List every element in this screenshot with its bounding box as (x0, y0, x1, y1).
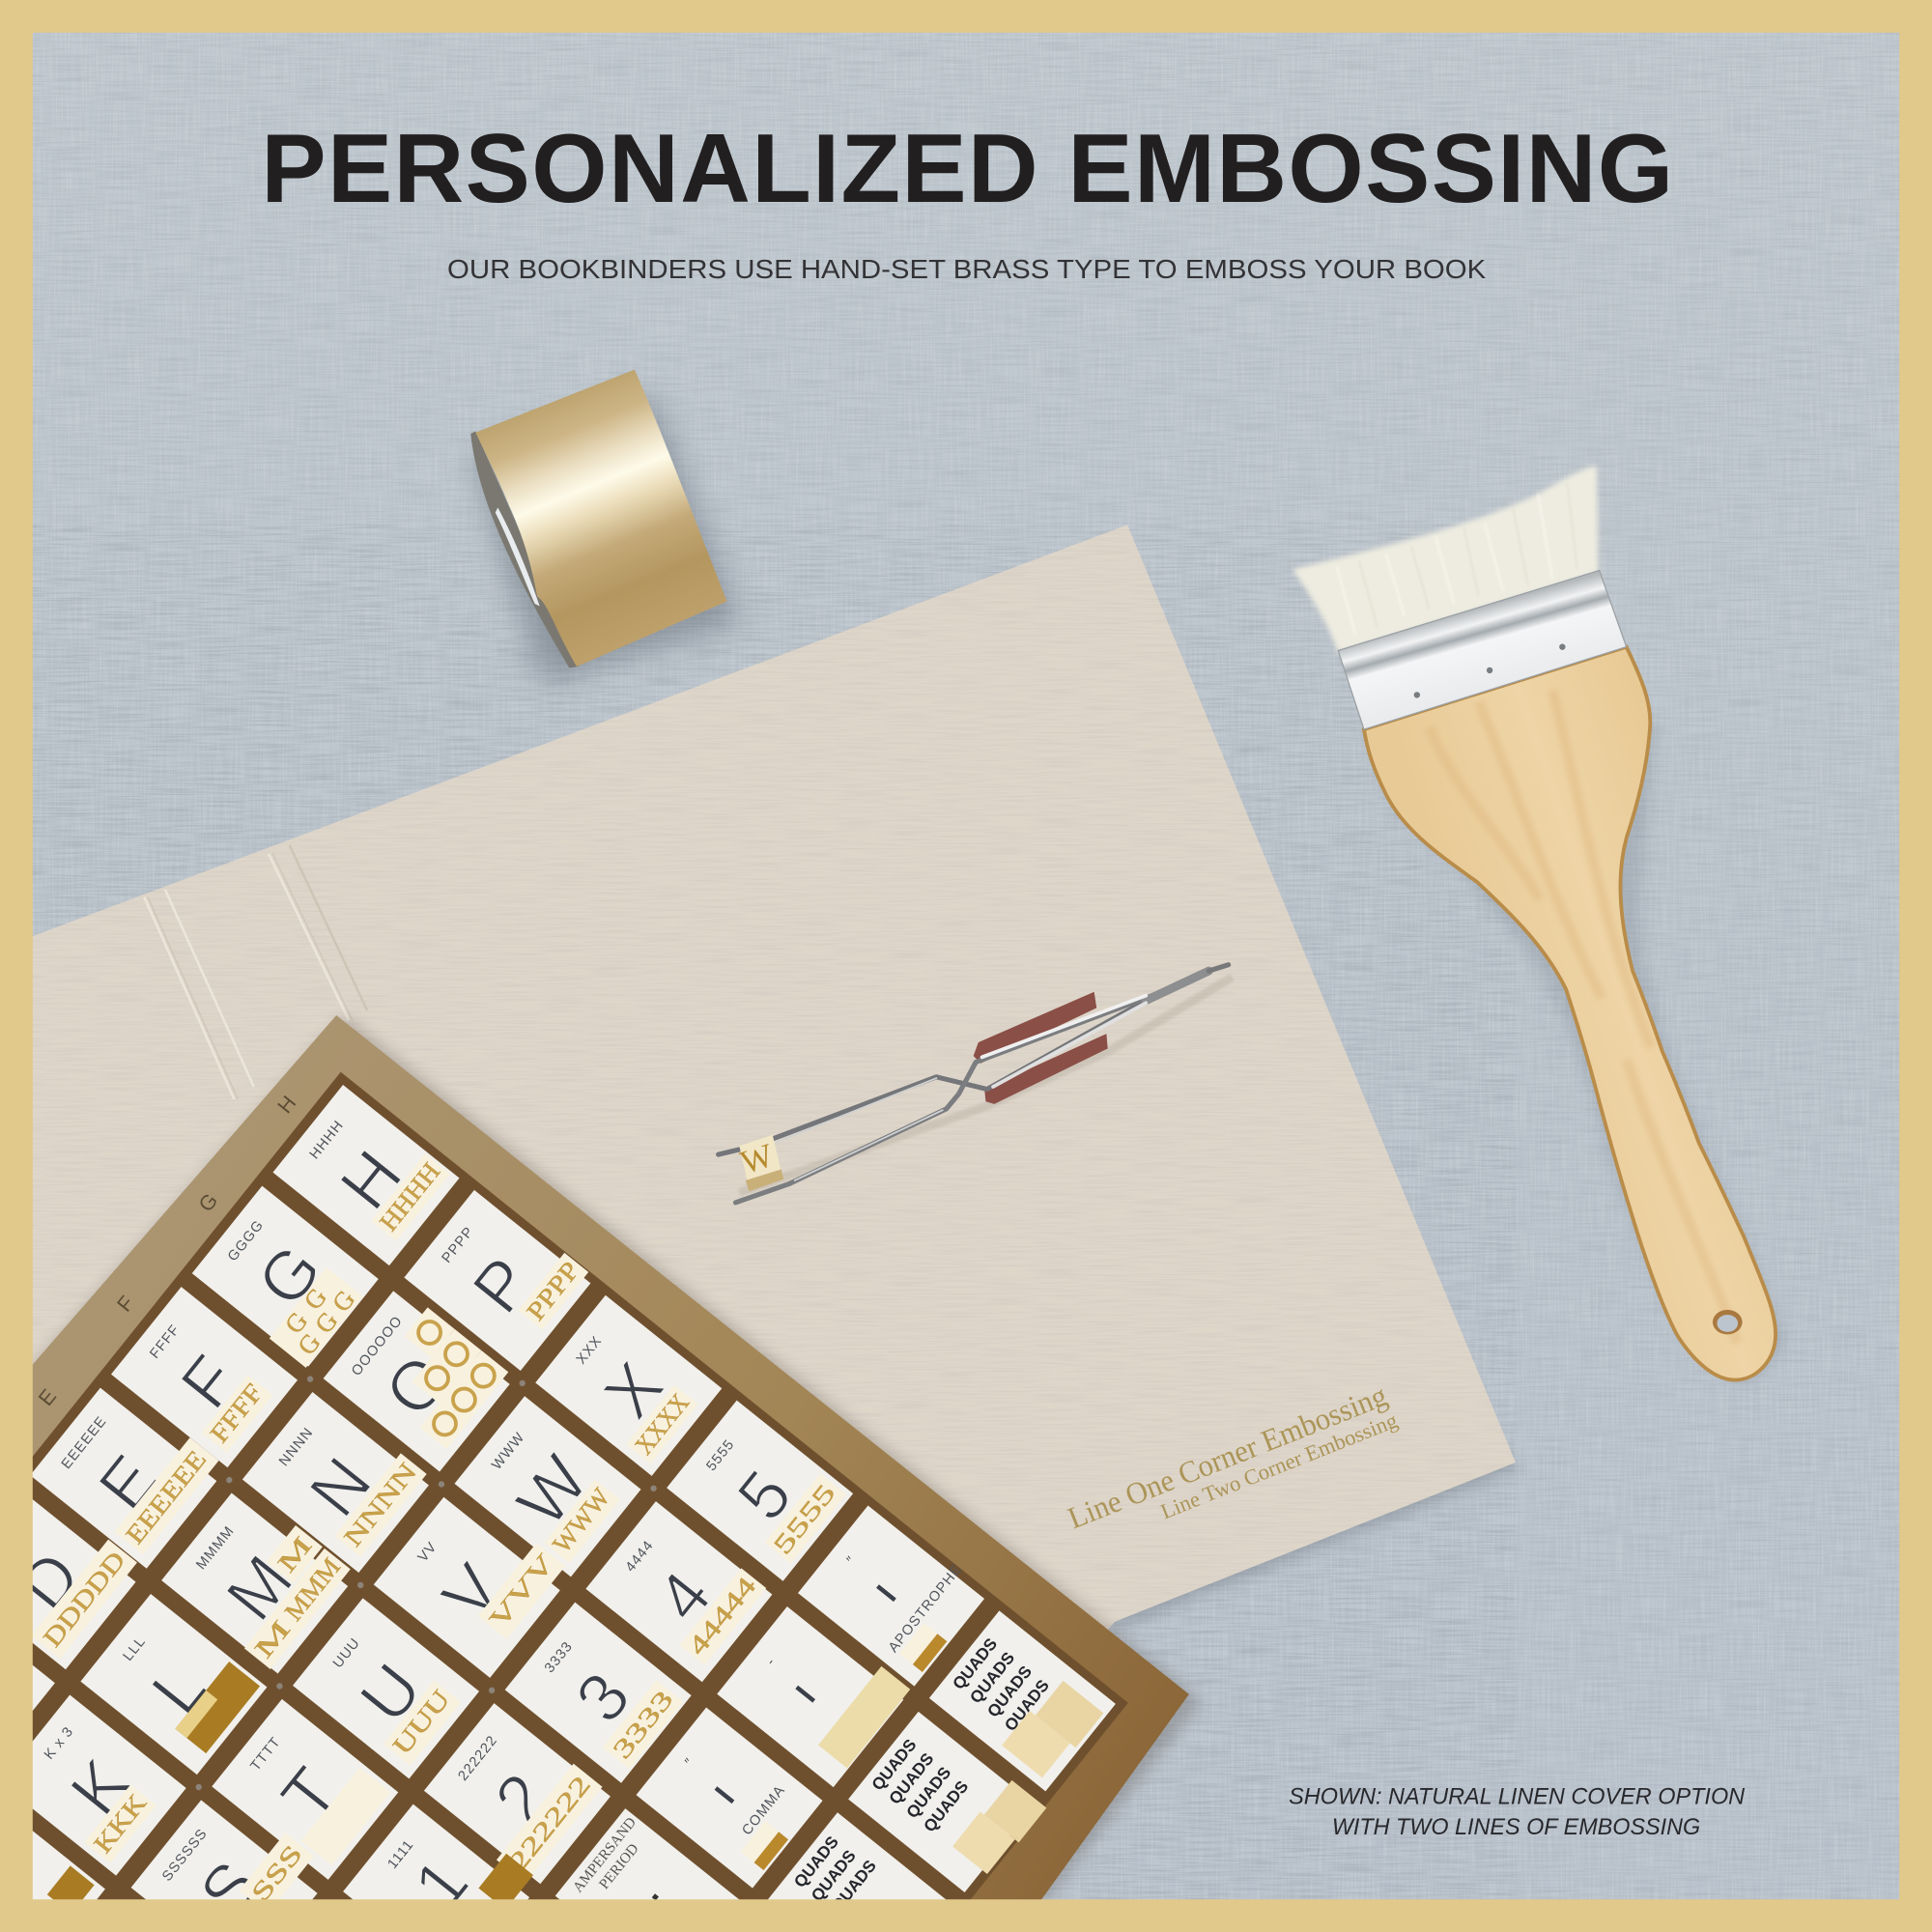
cell: 5: 5555 (703, 1436, 738, 1474)
cell: comma: ″ (682, 1755, 698, 1770)
cell: L: L (137, 1650, 221, 1728)
embossed line one: Line One Corner Embossing (1064, 1378, 1392, 1535)
cell: W (455, 1396, 641, 1577)
cell: ampersand and period: AMPERSAND (570, 1814, 639, 1895)
cell: P: PPPP (521, 1256, 585, 1326)
cell: S: S (185, 1847, 274, 1931)
cell: 5 (667, 1401, 853, 1581)
cell: F: FFFF (147, 1322, 184, 1362)
cell: P: PPPP (440, 1224, 477, 1266)
cell: V: V (427, 1549, 517, 1634)
tweezers holding a brass W type (719, 965, 1233, 1203)
caption: WITH TWO LINES OF EMBOSSING (1332, 1814, 1700, 1839)
bristles (1293, 466, 1598, 653)
cell: quads two: QUADS (920, 1776, 972, 1835)
cell: U: U (345, 1650, 437, 1737)
cell: ampersand and period (555, 1808, 742, 1922)
cell: L (80, 1594, 267, 1775)
tray interior dividers (32, 1072, 1128, 1900)
cell: 2 (418, 1701, 612, 1890)
cell: S: SSS (245, 1839, 308, 1907)
cell: 4: 4 (642, 1557, 726, 1635)
frame row letters: F (112, 1291, 139, 1316)
cell: O: OOOOOO (349, 1313, 406, 1379)
cell: hyphen: - (763, 1655, 779, 1668)
cell: K: K x 3 (42, 1724, 77, 1763)
brown grip pads (974, 992, 1108, 1104)
cell: M: M (248, 1614, 296, 1663)
cell: L: LLL (121, 1634, 149, 1664)
cell: E: EEEEEE (59, 1413, 110, 1472)
cell: S: SSSSSS (159, 1826, 211, 1885)
cell: 3: 3 (561, 1659, 645, 1737)
cell: quads two: QUADS (867, 1735, 921, 1794)
caption: SHOWN: NATURAL LINEN COVER OPTION (1289, 1783, 1746, 1808)
cell: 3 (505, 1603, 692, 1783)
metal ferrule (1338, 571, 1627, 729)
cell: 3: 3333 (607, 1685, 679, 1764)
caption (1289, 1783, 1746, 1839)
cell: W: WWW (547, 1482, 616, 1558)
cell: comma (637, 1708, 823, 1889)
cell: ampersand and period: PERIOD (596, 1840, 642, 1892)
cell: X: XXXX (629, 1388, 695, 1460)
wooden type tray cells (0, 1085, 1116, 1931)
cell: quads one: QUADS (983, 1662, 1036, 1720)
cell: X (535, 1295, 722, 1476)
cell: O (324, 1284, 515, 1472)
cell: quads one: QUADS (1001, 1676, 1053, 1735)
tray frame (32, 1015, 1189, 1900)
cell: O: O (370, 1341, 464, 1431)
cell: H: HHHH (374, 1157, 445, 1236)
cell: M: M (212, 1542, 308, 1634)
cell: D (0, 1489, 137, 1669)
cell: 4: 4444 (623, 1538, 657, 1576)
cell: H: HHHH (307, 1118, 347, 1162)
cell: V: VV (415, 1539, 440, 1565)
cell: quads two: QUADS (902, 1763, 954, 1822)
cell: apostrophe: ″ (844, 1553, 860, 1568)
cell: G: GGGG (225, 1217, 268, 1264)
cell: X: XXX (574, 1333, 606, 1367)
frame row letters: G (193, 1188, 222, 1216)
cell: P: P (458, 1243, 547, 1327)
subtitle: OUR BOOKBINDERS USE HAND-SET BRASS TYPE TO EMBOSS YOUR BOOK (447, 254, 1487, 284)
cell: V (374, 1480, 574, 1678)
steel arms (719, 965, 1229, 1203)
cell: T (212, 1699, 398, 1880)
cell: quads three: QUADS (807, 1846, 860, 1905)
cell: G (190, 1186, 379, 1369)
cell: E: E (84, 1441, 173, 1525)
cell: 2: 2 (480, 1759, 564, 1837)
cell: quads two (848, 1708, 1046, 1899)
cell: D: DDDDD (38, 1546, 130, 1652)
cell: 1: 1111 (385, 1837, 417, 1872)
cell: U: UUU (386, 1685, 456, 1760)
brass W block (736, 1135, 783, 1191)
cell: quads three (767, 1812, 953, 1922)
cell: U (293, 1598, 479, 1778)
frame row letters: H (272, 1091, 300, 1118)
cell: comma: COMMA (739, 1782, 788, 1838)
cell: N: N (295, 1443, 386, 1531)
title: PERSONALIZED EMBOSSING (261, 115, 1673, 223)
cell: quads three: QUADS (789, 1833, 842, 1891)
cell: M: MMM (278, 1552, 346, 1626)
divider rivets (63, 1274, 658, 1896)
cell: quads two: QUADS (885, 1749, 937, 1808)
cell: 3: 3333 (542, 1638, 576, 1676)
cell: W: WWW (489, 1430, 528, 1473)
cell: G: GGG (292, 1285, 360, 1360)
cell: X: X (589, 1349, 678, 1433)
cell: 1: 1 (399, 1844, 484, 1922)
type tray shadow (32, 1016, 1202, 1900)
cell: P (404, 1184, 595, 1371)
cell: 1 (343, 1804, 533, 1922)
cell: 4 (585, 1500, 773, 1682)
cell: M: M (271, 1530, 318, 1577)
cell: H (272, 1085, 460, 1265)
cell: F (111, 1287, 298, 1467)
cell: S (131, 1800, 318, 1931)
cell: E: EEEEEE (120, 1445, 212, 1549)
cell: C (7, 1645, 55, 1743)
cell: 2: 222222 (502, 1770, 596, 1877)
cell: T: T (267, 1753, 354, 1834)
cell: K: K (56, 1745, 145, 1830)
cell: F: F (166, 1342, 253, 1423)
cell: quads one: QUADS (949, 1634, 1001, 1693)
frame row letters (34, 1089, 300, 1412)
frame row letters: E (34, 1384, 61, 1410)
cell: F: FFFF (204, 1378, 269, 1448)
cell: E (30, 1375, 227, 1569)
cell: D: D (4, 1538, 96, 1625)
cell: H: H (326, 1136, 417, 1224)
cell: M (160, 1482, 357, 1675)
brush (1293, 466, 1786, 1386)
cell: N: NNNN (276, 1425, 317, 1469)
cell: quads one (929, 1610, 1116, 1791)
cell: apostrophe: APOSTROPHE (886, 1561, 966, 1656)
foil tape roll (470, 370, 739, 684)
cell: V: VVV (483, 1548, 560, 1634)
cell: M: MMMM (193, 1523, 238, 1573)
cell: G: GG (279, 1283, 332, 1339)
cell: W: W (502, 1441, 604, 1541)
cell: 4: 44444 (682, 1571, 762, 1661)
cell: 5: 5555 (767, 1478, 840, 1560)
cell: quads three: QUADS (828, 1856, 880, 1915)
cell: J (8, 1810, 105, 1922)
cell: apostrophe (798, 1498, 990, 1687)
cell: quads one: QUADS (966, 1648, 1018, 1707)
cell: T: TTTT (248, 1734, 284, 1774)
book: natural linen cover (32, 525, 1523, 1900)
cell: N (242, 1386, 434, 1573)
cell: 5: 5 (723, 1457, 808, 1535)
cell: G: G (242, 1231, 337, 1321)
spine hinge grooves (144, 845, 367, 1099)
cell: U: UUU (330, 1635, 363, 1671)
cell: 2: 222222 (456, 1733, 500, 1784)
cell: N: NNNN (338, 1457, 422, 1552)
cell: K: KKK (88, 1788, 153, 1859)
cell: K (0, 1695, 186, 1876)
handle (1364, 647, 1776, 1380)
cell: hyphen (717, 1597, 911, 1787)
embossed line two: Line Two Corner Embossing (1157, 1407, 1401, 1523)
brass W block: W (736, 1137, 778, 1181)
